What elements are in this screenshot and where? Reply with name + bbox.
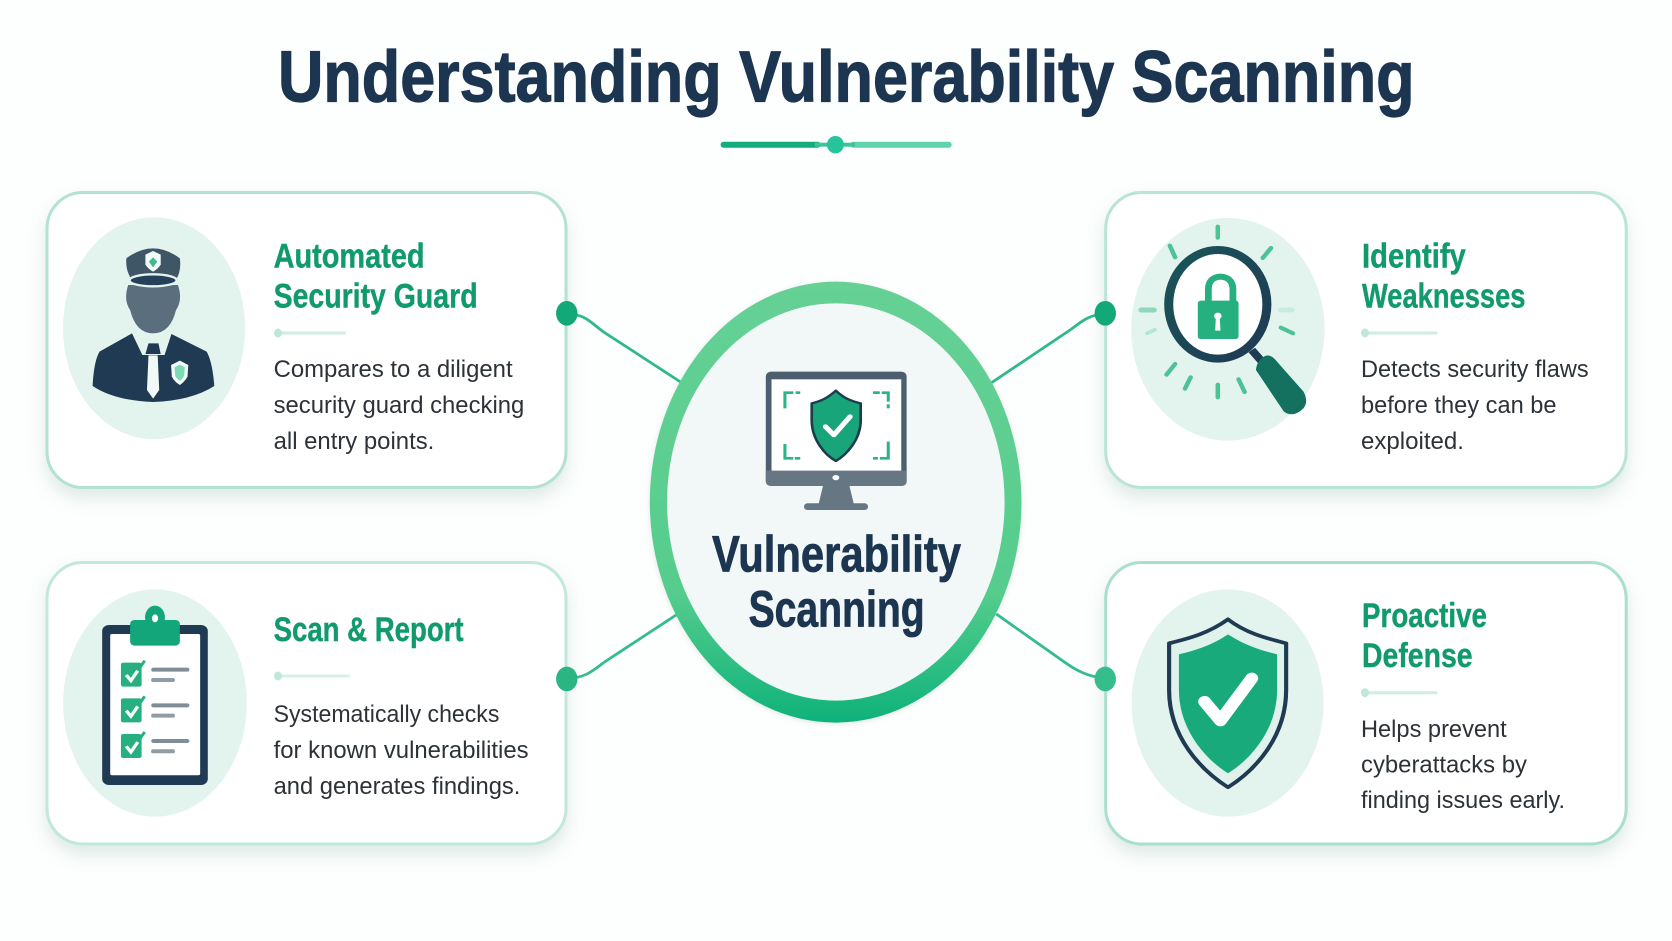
- hub label: Vulnerability: [712, 526, 962, 583]
- heading: identify weaknesses: Weaknesses: [1362, 277, 1526, 315]
- central hub: vulnerability scanning: [650, 282, 1021, 723]
- connector: report panel to hub: [556, 614, 678, 691]
- description: identify weaknesses: Detects security flaws: [1361, 356, 1589, 383]
- hub label: [712, 526, 962, 638]
- description: scan and report: and generates findings.: [274, 773, 520, 800]
- icon: clipboard checklist: [63, 589, 247, 817]
- title underline with node: [721, 136, 952, 153]
- description: automated security guard: Compares to a diligent: [274, 356, 513, 383]
- heading: identify weaknesses: Identify: [1362, 237, 1466, 275]
- panel: proactive defense: [1106, 562, 1626, 844]
- description: automated security guard: security guard checking: [274, 392, 524, 419]
- description: identify weaknesses: before they can be: [1361, 392, 1556, 419]
- heading: automated security guard: Security Guard: [274, 277, 478, 315]
- heading: identify weaknesses: [1362, 237, 1526, 315]
- connector: weaknesses panel to hub: [992, 301, 1116, 383]
- description: proactive defense: [1361, 716, 1565, 814]
- icon: monitor with shield: [766, 372, 907, 510]
- description: scan and report: [274, 701, 529, 800]
- panel: automated security guard: [47, 192, 566, 488]
- connector: guard panel to hub: [556, 301, 682, 383]
- description: proactive defense: finding issues early.: [1361, 787, 1565, 814]
- panel: scan and report: [47, 562, 566, 844]
- description: scan and report: Systematically checks: [274, 701, 499, 728]
- heading: automated security guard: [274, 237, 478, 315]
- hub label: Scanning: [749, 580, 925, 638]
- heading divider: [1361, 688, 1438, 697]
- description: scan and report: for known vulnerabilities: [274, 737, 529, 764]
- description: proactive defense: Helps prevent: [1361, 716, 1507, 743]
- description: automated security guard: [274, 356, 524, 455]
- title: Understanding Vulnerability Scanning: [278, 38, 1414, 118]
- connector: defense panel to hub: [996, 614, 1116, 691]
- heading: proactive defense: [1362, 597, 1487, 675]
- heading divider: [274, 672, 350, 680]
- icon: shield with check: [1132, 589, 1324, 817]
- heading: proactive defense: Proactive: [1362, 597, 1487, 635]
- heading: proactive defense: Defense: [1362, 637, 1473, 675]
- panel: identify weaknesses: [1106, 192, 1626, 488]
- heading: scan and report: Scan & Report: [274, 611, 464, 649]
- heading: automated security guard: Automated: [274, 237, 425, 275]
- icon: magnifying glass with padlock: [1131, 218, 1324, 441]
- heading divider: [274, 328, 346, 338]
- heading divider: [1361, 328, 1438, 338]
- description: identify weaknesses: exploited.: [1361, 428, 1464, 455]
- icon: security guard: [63, 217, 245, 439]
- description: proactive defense: cyberattacks by: [1361, 752, 1527, 778]
- description: identify weaknesses: [1361, 356, 1589, 455]
- description: automated security guard: all entry points.: [274, 428, 434, 455]
